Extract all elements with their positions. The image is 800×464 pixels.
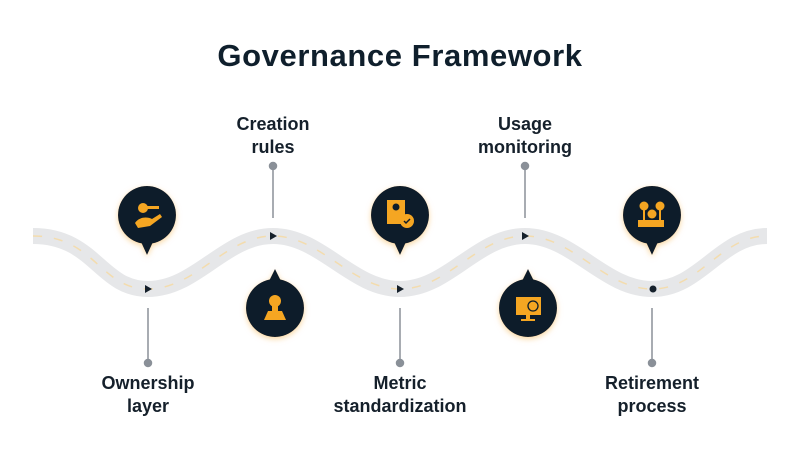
icon circle: standardization [371,186,429,255]
label: creation rules: rules [251,137,295,157]
label: usage monitoring: Usage [498,114,552,134]
label: usage monitoring: monitoring [478,137,572,157]
icon circle: creation [246,269,304,337]
label: ownership layer: layer [127,396,169,416]
label: ownership layer [101,373,194,416]
label: usage monitoring [478,114,572,157]
label: retirement process: Retirement [605,373,699,393]
road markers [145,232,656,293]
label: creation rules: Creation [236,114,310,134]
label: ownership layer: Ownership [101,373,194,393]
icon circle: ownership [118,186,176,255]
label: metric standardization: standardization [333,396,466,416]
label: metric standardization [333,373,466,416]
icon circle: retirement [623,186,681,255]
label: retirement process [605,373,699,416]
title: Governance Framework [217,38,583,73]
icon circle: monitoring [499,269,557,337]
label: retirement process: process [617,396,687,416]
road [33,236,767,289]
connectors [144,162,656,366]
label: metric standardization: Metric [373,373,426,393]
label: creation rules [236,114,310,157]
